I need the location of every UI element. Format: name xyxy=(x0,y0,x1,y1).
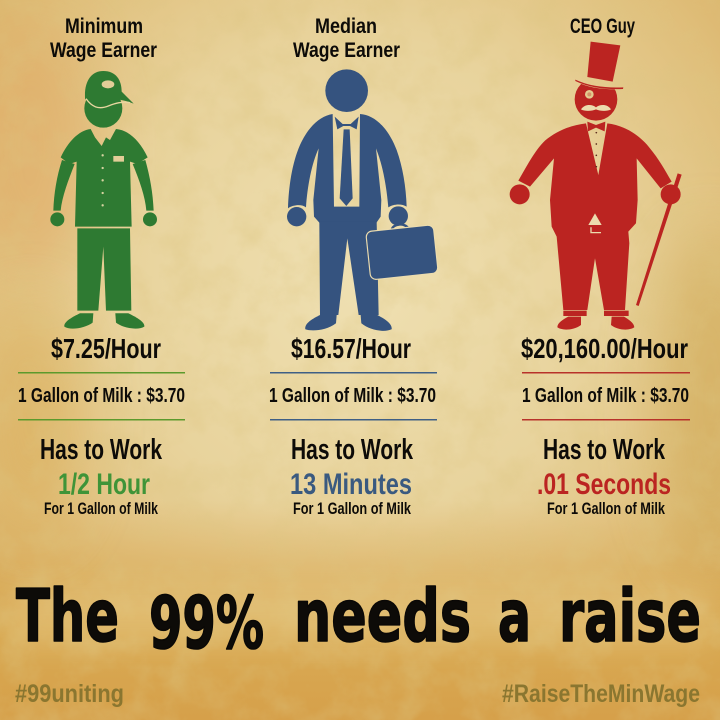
icon: green worker figure xyxy=(50,71,157,329)
wage: $7.25/Hour: $7.25/Hour xyxy=(51,333,161,364)
icon: red CEO figure with top hat and cane xyxy=(510,42,682,330)
icon: blue businessman figure with briefcase xyxy=(287,69,438,331)
work time: 1/2 hour: 1/2 Hour xyxy=(58,468,150,501)
milk price row with rules: 1 Gallon of Milk : $3.70 xyxy=(18,385,185,407)
column: CEO guy xyxy=(510,15,690,518)
title: the 99% needs a raise xyxy=(10,574,710,665)
heading: minimum wage earner: Wage Earner xyxy=(50,39,157,62)
work time: .01 seconds: .01 Seconds xyxy=(537,468,671,501)
title: the 99% needs a raise: The xyxy=(16,574,119,658)
heading: minimum wage earner: Minimum xyxy=(65,15,143,38)
work time: 13 minutes: 13 Minutes xyxy=(290,468,412,501)
work time: 13 minutes: Has to Work xyxy=(291,434,414,466)
column: minimum wage earner xyxy=(18,15,185,518)
work time: .01 seconds xyxy=(537,434,671,518)
hashtag: 99uniting: #99uniting xyxy=(15,680,124,708)
work time: 1/2 hour: Has to Work xyxy=(40,434,163,466)
heading: median wage earner: Median xyxy=(315,15,377,38)
column: median wage earner xyxy=(269,15,438,518)
work time: 13 minutes xyxy=(290,434,414,518)
work time: 1/2 hour xyxy=(40,434,163,518)
heading: median wage earner: Wage Earner xyxy=(293,39,400,62)
work time: 13 minutes: For 1 Gallon of Milk xyxy=(293,499,411,518)
title: the 99% needs a raise: 99% xyxy=(149,581,264,665)
work time: 1/2 hour: For 1 Gallon of Milk xyxy=(44,499,158,518)
milk price row with rules: 1 Gallon of Milk : $3.70 xyxy=(269,385,436,407)
work time: .01 seconds: Has to Work xyxy=(543,434,666,466)
title: the 99% needs a raise: a xyxy=(498,574,531,658)
title: the 99% needs a raise: needs xyxy=(294,574,471,658)
heading: minimum wage earner xyxy=(50,15,157,62)
heading: median wage earner xyxy=(293,15,400,62)
heading: CEO guy: CEO Guy xyxy=(570,15,635,38)
wage: $16.57/Hour: $16.57/Hour xyxy=(291,333,411,364)
work time: .01 seconds: For 1 Gallon of Milk xyxy=(547,499,665,518)
